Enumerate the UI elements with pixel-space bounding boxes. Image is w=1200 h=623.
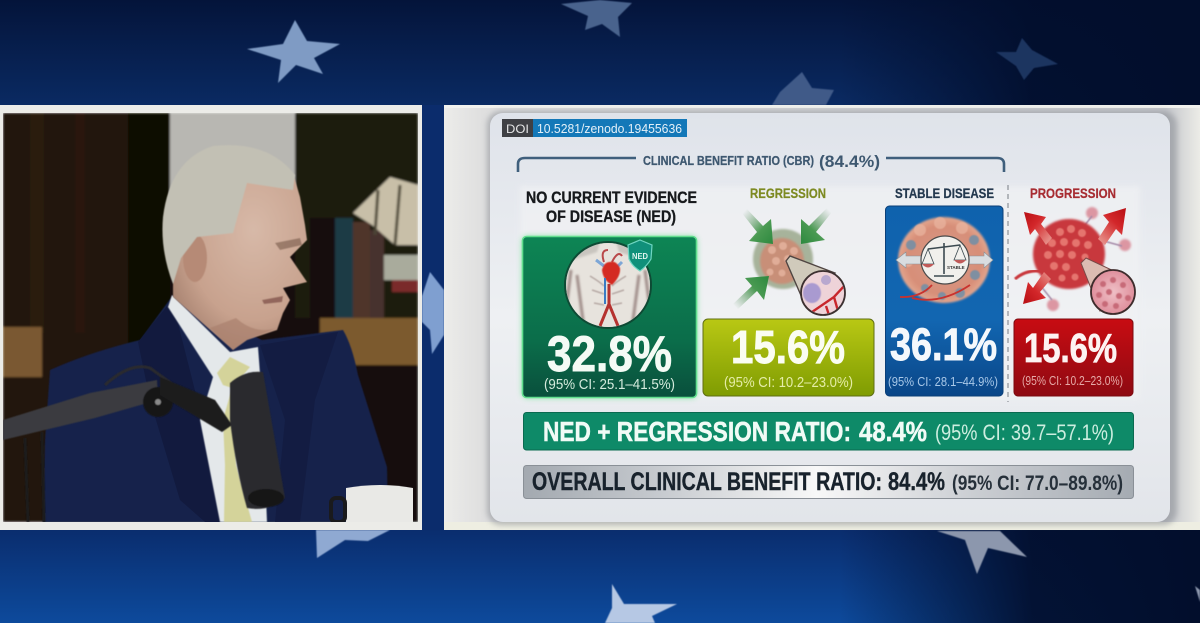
card [490,113,1170,522]
column: stable disease: (95% CI: 28.1–44.9%) [888,374,998,389]
column: progression: PROGRESSION [1030,186,1116,201]
icon: anatomy circle with heart [565,240,652,330]
shirt [168,295,267,522]
CBR bracket and title [518,152,1004,172]
column: regression: (95% CI: 10.2–23.0%) [724,375,853,391]
CBR bracket and title: CLINICAL BENEFIT RATIO (CBR) [643,154,814,168]
DOI badge: DOI [506,122,529,136]
panel: video of speaker [0,105,422,530]
column: NED: NO CURRENT EVIDENCE [526,188,697,207]
column: stable disease: STABLE DISEASE [895,186,994,201]
icon: shrinking tumour [733,208,846,318]
microphone and boom [3,367,285,522]
CBR bracket and title: (84.4%) [819,152,880,171]
bar: overall clinical benefit ratio: 84.4% [888,468,945,496]
bar: NED + regression ratio: NED + REGRESSION RATIO: [543,416,851,447]
column: NED [522,188,697,398]
panel: slide frame [444,105,1200,530]
icon: spreading tumour [1015,207,1135,314]
column: regression: REGRESSION [750,186,826,201]
suit [43,295,388,522]
icon: NED shield: NED [632,251,648,261]
column: NED: OF DISEASE (NED) [546,207,676,226]
bar: NED + regression ratio [524,412,1134,450]
bar: NED + regression ratio: (95% CI: 39.7–57.1%) [935,420,1114,445]
column: progression: (95% CI: 10.2–23.0%) [1022,374,1123,388]
column: regression [703,186,874,396]
column: NED: 32.8% [547,326,672,382]
bar: overall clinical benefit ratio: OVERALL CLINICAL BENEFIT RATIO: [532,468,882,496]
column: progression: 15.6% [1024,325,1117,371]
bar: overall clinical benefit ratio [524,466,1134,498]
column: stable disease [886,186,1003,396]
bar: overall clinical benefit ratio: (95% CI: 77.0–89.8%) [952,472,1123,495]
head [162,145,307,350]
bar: NED + regression ratio: 48.4% [859,416,927,447]
icon: tumour with balance scale: STABLE [947,265,965,270]
DOI badge [502,119,687,137]
studio background [3,113,418,522]
column: progression [1014,186,1135,396]
column: NED: (95% CI: 25.1–41.5%) [544,376,675,393]
icon: tumour with balance scale [896,217,993,303]
column: stable disease: 36.1% [890,319,997,370]
mug [346,485,413,522]
hair [162,145,295,284]
tie [217,357,252,522]
DOI badge: 10.5281/zenodo.19455636 [537,122,682,136]
column: regression: 15.6% [731,321,845,373]
